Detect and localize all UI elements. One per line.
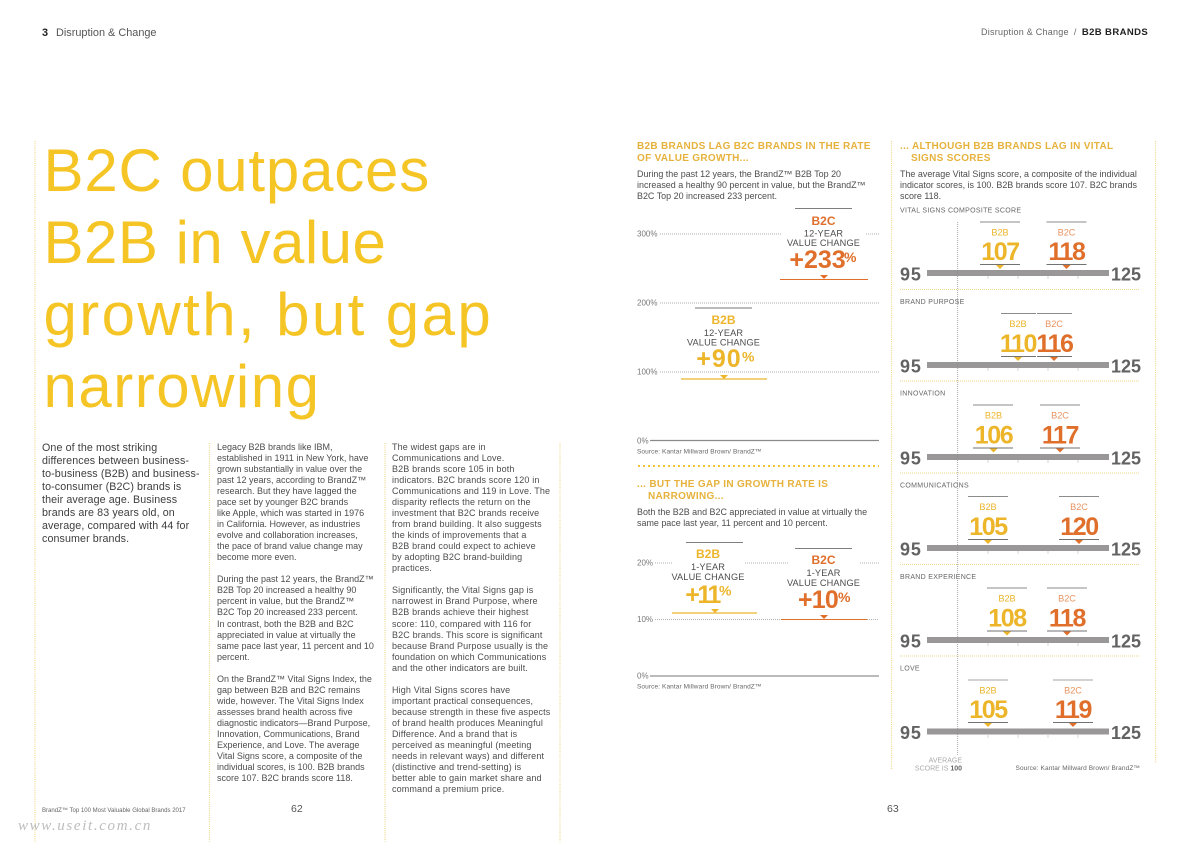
row: vital signs composite: 118 xyxy=(1048,238,1086,266)
description: The average Vital Signs score, a composite of the individual xyxy=(900,169,1137,179)
row: brand purpose: BRAND PURPOSE xyxy=(900,299,965,306)
body column 1: individual scores, is 100. B2B brands xyxy=(217,762,365,772)
callout: B2B 12-year: 12-YEAR xyxy=(704,328,743,338)
description: indicator scores, is 100. B2B brands score 107. B2C brands xyxy=(900,180,1138,190)
row: innovation: 125 xyxy=(1111,448,1141,468)
row: love: LOVE xyxy=(900,666,920,672)
axis grid: 0% xyxy=(637,672,649,680)
row: innovation: B2B xyxy=(985,410,1002,420)
source: Source: Kantar Millward Brown/ BrandZ™ xyxy=(637,448,761,456)
heading: ... ALTHOUGH B2B BRANDS LAG IN VITAL xyxy=(900,141,1113,152)
header: section right: / xyxy=(1074,27,1077,37)
body column 1: assesses brand health across five xyxy=(217,707,353,717)
body column 2: because strength in these five aspects xyxy=(392,707,550,717)
source: Source: Kantar Millward Brown/ BrandZ™ xyxy=(637,684,761,690)
intro text: to-business (B2B) and business- xyxy=(42,468,200,480)
body column 2: score: 110, compared with 116 for xyxy=(392,618,531,628)
body column 2: Difference. And a brand that is xyxy=(392,729,517,739)
callout: B2B 1-year: % xyxy=(719,582,732,598)
callout: B2B 1-year: 1-YEAR xyxy=(691,562,725,572)
row: love: 119 xyxy=(1055,696,1092,724)
row: communications: 125 xyxy=(1111,540,1141,560)
panel: 1-year value growth xyxy=(637,479,879,690)
body column 1: evolve and collaboration increases, xyxy=(217,530,358,540)
body column 1: percent in value, but the BrandZ™ xyxy=(217,596,354,606)
callout: B2B 1-year xyxy=(671,542,757,613)
body column 2: indicators. B2C brands score 120 in xyxy=(392,475,539,485)
row: brand experience: B2C xyxy=(1058,594,1076,604)
body column 2: Significantly, the Vital Signs gap is xyxy=(392,585,533,595)
body column 2: because Brand Purpose usually is the xyxy=(392,641,548,651)
intro text xyxy=(42,442,200,545)
title xyxy=(44,136,493,420)
row: communications: B2C xyxy=(1070,502,1088,512)
row: love: 125 xyxy=(1111,723,1141,743)
intro text: their average age. Business xyxy=(42,494,177,506)
watermark: www.useit.com.cn xyxy=(18,818,152,834)
heading: ... BUT THE GAP IN GROWTH RATE IS xyxy=(637,479,828,490)
body column 1: grown substantially in value over the xyxy=(217,464,362,474)
row: love xyxy=(900,666,1141,743)
body column 1: Legacy B2B brands like IBM, xyxy=(217,442,333,452)
axis grid: 20% xyxy=(637,558,653,568)
callout: B2B 12-year: +90 xyxy=(696,345,742,373)
body column 1 xyxy=(217,442,374,783)
row: brand experience xyxy=(900,574,1141,652)
row: vital signs composite: 125 xyxy=(1111,264,1141,284)
body column 1: appreciated in value at virtually the xyxy=(217,630,356,640)
body column 2: Communications and Love. xyxy=(392,453,504,463)
body column 2: important practical consequences, xyxy=(392,696,533,706)
callout: B2B 12-year: B2B xyxy=(711,313,736,327)
axis grid: 10% xyxy=(637,615,653,624)
body column 1: Innovation, Communications, Brand xyxy=(217,729,360,739)
page number 62: 62 xyxy=(291,803,303,815)
row: innovation: B2C xyxy=(1051,410,1069,420)
row: vital signs composite: B2C xyxy=(1058,228,1076,238)
title: B2B in value xyxy=(44,208,386,276)
callout: B2C 1-year: 1-YEAR xyxy=(806,568,841,578)
row: innovation: 106 xyxy=(975,422,1013,450)
body column 1: Vital Signs score, a composite of the xyxy=(217,751,362,761)
row: brand experience: 108 xyxy=(988,604,1027,632)
row: communications: 120 xyxy=(1060,513,1098,541)
body column 1: pace set by younger B2C brands xyxy=(217,497,348,507)
row: vital signs composite: VITAL SIGNS COMPOSITE SCORE xyxy=(900,208,1021,214)
row: communications xyxy=(900,482,1141,560)
row: brand purpose: B2B xyxy=(1009,319,1027,329)
intro text: consumer brands. xyxy=(42,533,129,545)
body column 2: perceived as meaningful (meeting xyxy=(392,740,532,750)
axis grid xyxy=(637,558,879,680)
callout: B2C 12-year: VALUE CHANGE xyxy=(787,238,860,248)
intro text: brands are 83 years old, on xyxy=(42,507,175,519)
body column 2: The widest gaps are in xyxy=(392,442,486,452)
row: love: B2B xyxy=(979,686,997,696)
body column 2: narrowest in Brand Purpose, where xyxy=(392,596,538,606)
body column 2: B2B brand could expect to achieve xyxy=(392,541,536,551)
heading: SIGNS SCORES xyxy=(911,153,991,164)
divider dots xyxy=(638,465,879,467)
row: brand purpose: 116 xyxy=(1036,330,1073,358)
body column 2 xyxy=(392,442,550,794)
callout: B2C 1-year: VALUE CHANGE xyxy=(787,578,860,588)
row: love: 95 xyxy=(900,723,922,743)
row: love: 105 xyxy=(969,696,1008,724)
title: B2C outpaces xyxy=(44,136,430,204)
row: love: B2C xyxy=(1064,686,1082,696)
body column 2: the kinds of improvements that a xyxy=(392,530,527,540)
description: score 118. xyxy=(900,191,941,201)
row: communications: 95 xyxy=(900,540,922,560)
callout: B2C 1-year: +10 xyxy=(798,586,838,614)
body column 1: Experience, and Love. The average xyxy=(217,740,359,750)
body column 2: B2B brands score 105 in both xyxy=(392,464,514,474)
body column 2: investment that B2C brands receive xyxy=(392,508,539,518)
axis grid: 0% xyxy=(637,436,649,446)
average marker line xyxy=(957,222,959,755)
body column 2: Communications and 119 in Love. The xyxy=(392,486,550,496)
callout: B2C 12-year: 12-YEAR xyxy=(804,228,843,238)
body column 1: During the past 12 years, the BrandZ™ xyxy=(217,574,374,584)
body column 1: On the BrandZ™ Vital Signs Index, the xyxy=(217,674,372,684)
body column 1: B2B Top 20 increased a healthy 90 xyxy=(217,585,356,595)
row: brand experience: BRAND EXPERIENCE xyxy=(900,574,976,581)
body column 1: established in 1911 in New York, have xyxy=(217,453,368,463)
row: brand purpose: 125 xyxy=(1111,356,1141,376)
description: increased a healthy 90 percent in value, but the BrandZ™ xyxy=(637,180,866,190)
row: innovation: INNOVATION xyxy=(900,390,946,398)
body column 1: In contrast, both the B2B and B2C xyxy=(217,618,354,628)
row: brand purpose xyxy=(900,299,1141,376)
row: vital signs composite: B2B xyxy=(991,228,1009,238)
axis grid: 300% xyxy=(637,230,657,238)
row: communications: 105 xyxy=(969,513,1008,541)
body column 1: like Apple, which was started in 1976 xyxy=(217,508,364,518)
body column 1: diagnostic indicators—Brand Purpose, xyxy=(217,718,370,728)
row: brand experience: 95 xyxy=(900,632,922,652)
callout: B2C 12-year: % xyxy=(844,249,857,265)
callout: B2B 12-year: % xyxy=(742,348,755,364)
row: innovation: 117 xyxy=(1042,422,1079,450)
axis grid: 200% xyxy=(637,298,657,308)
header: section right: Disruption & Change B2B BRANDS xyxy=(981,27,1148,38)
title: growth, but gap xyxy=(44,280,493,348)
body column 2: foundation on which Communications xyxy=(392,652,546,662)
average label: AVERAGE xyxy=(929,758,962,764)
row: brand purpose: B2C xyxy=(1045,319,1063,329)
callout: B2C 12-year: +233 xyxy=(789,246,846,274)
header: section left: 3 xyxy=(42,27,48,39)
description: same pace last year, 11 percent and 10 percent. xyxy=(637,518,828,528)
description: During the past 12 years, the BrandZ™ B2B Top 20 xyxy=(637,169,841,179)
callout: B2B 1-year: B2B xyxy=(696,547,720,561)
average label: SCORE IS 100 xyxy=(915,766,962,772)
panel: 12-year value growth xyxy=(637,141,879,456)
heading: NARROWING... xyxy=(648,491,724,502)
header: section left: Disruption & Change xyxy=(56,27,156,39)
body column 2: (distinctive and trend-setting) is xyxy=(392,762,521,772)
body column 1: same pace last year, 11 percent and 10 xyxy=(217,641,374,651)
row: communications: COMMUNICATIONS xyxy=(900,482,969,490)
body column 2: by adopting B2C brand-building xyxy=(392,552,522,562)
body column 2: needs in relevant ways) and different xyxy=(392,751,544,761)
body column 1: wide, however. The Vital Signs Index xyxy=(217,696,364,706)
callout: B2C 1-year xyxy=(781,548,867,620)
intro text: to-consumer (B2C) brands is xyxy=(42,481,181,493)
intro text: One of the most striking xyxy=(42,442,157,454)
body column 2: High Vital Signs scores have xyxy=(392,685,510,695)
row: brand experience: B2B xyxy=(998,594,1016,604)
body column 1: past 12 years, according to BrandZ™ xyxy=(217,475,366,485)
heading: B2B BRANDS LAG B2C BRANDS IN THE RATE xyxy=(637,141,871,152)
row: vital signs composite: 95 xyxy=(900,264,922,284)
row: brand experience: 125 xyxy=(1111,632,1141,652)
title: narrowing xyxy=(44,352,320,420)
body column 2: command a premium price. xyxy=(392,784,504,794)
body column 1: percent. xyxy=(217,652,250,662)
row: vital signs composite xyxy=(900,208,1141,284)
callout: B2B 12-year: VALUE CHANGE xyxy=(687,338,760,348)
body column 2: better able to gain market share and xyxy=(392,773,542,783)
callout: B2C 12-year: B2C xyxy=(811,214,836,228)
intro text: average, compared with 44 for xyxy=(42,520,189,532)
source: Source: Kantar Millward Brown/ BrandZ™ xyxy=(1016,765,1140,772)
body column 1: research. But they have lagged the xyxy=(217,486,357,496)
body column 2: B2B brands achieve their highest xyxy=(392,607,529,617)
callout: B2B 1-year: VALUE CHANGE xyxy=(671,572,745,582)
row: brand purpose: 95 xyxy=(900,356,922,376)
body column 1: in California. However, as industries xyxy=(217,519,360,529)
callout: B2C 12-year xyxy=(780,208,868,280)
callout: B2B 1-year: +11 xyxy=(685,581,721,609)
body column 2: of brand health produces Meaningful xyxy=(392,718,543,728)
body column 1: gap between B2B and B2C remains xyxy=(217,685,360,695)
row dividers xyxy=(900,290,1140,656)
page number 63: 63 xyxy=(887,803,899,815)
row: innovation xyxy=(900,390,1141,468)
body column 2: from brand building. It also suggests xyxy=(392,519,542,529)
intro text: differences between business- xyxy=(42,455,189,467)
panel: vital signs xyxy=(900,141,1141,772)
body column 1: become more even. xyxy=(217,552,297,562)
body column 2: practices. xyxy=(392,563,432,573)
axis grid: 100% xyxy=(637,368,657,376)
callout: B2C 1-year: % xyxy=(838,589,851,605)
row: brand purpose: 110 xyxy=(1000,330,1037,358)
description: B2C Top 20 increased 233 percent. xyxy=(637,191,777,201)
row: vital signs composite: 107 xyxy=(981,238,1019,266)
row: innovation: 95 xyxy=(900,448,922,468)
footer credit: BrandZ™ Top 100 Most Valuable Global Brands 2017 xyxy=(42,808,186,814)
row: communications: B2B xyxy=(979,502,997,512)
body column 2: and the other indicators are built. xyxy=(392,663,528,673)
body column 2: B2C brands. This score is significant xyxy=(392,630,543,640)
description: Both the B2B and B2C appreciated in value at virtually the xyxy=(637,507,867,517)
body column 1: B2C Top 20 increased 233 percent. xyxy=(217,607,358,617)
body column 1: the pace of brand value change may xyxy=(217,541,363,551)
body column 2: disparity reflects the return on the xyxy=(392,497,531,507)
heading: OF VALUE GROWTH... xyxy=(637,153,749,164)
body column 1: score 107. B2C brands score 118. xyxy=(217,773,353,783)
axis grid xyxy=(637,230,879,446)
row: brand experience: 118 xyxy=(1049,604,1087,632)
callout: B2C 1-year: B2C xyxy=(811,553,836,567)
callout: B2B 12-year xyxy=(681,308,767,379)
